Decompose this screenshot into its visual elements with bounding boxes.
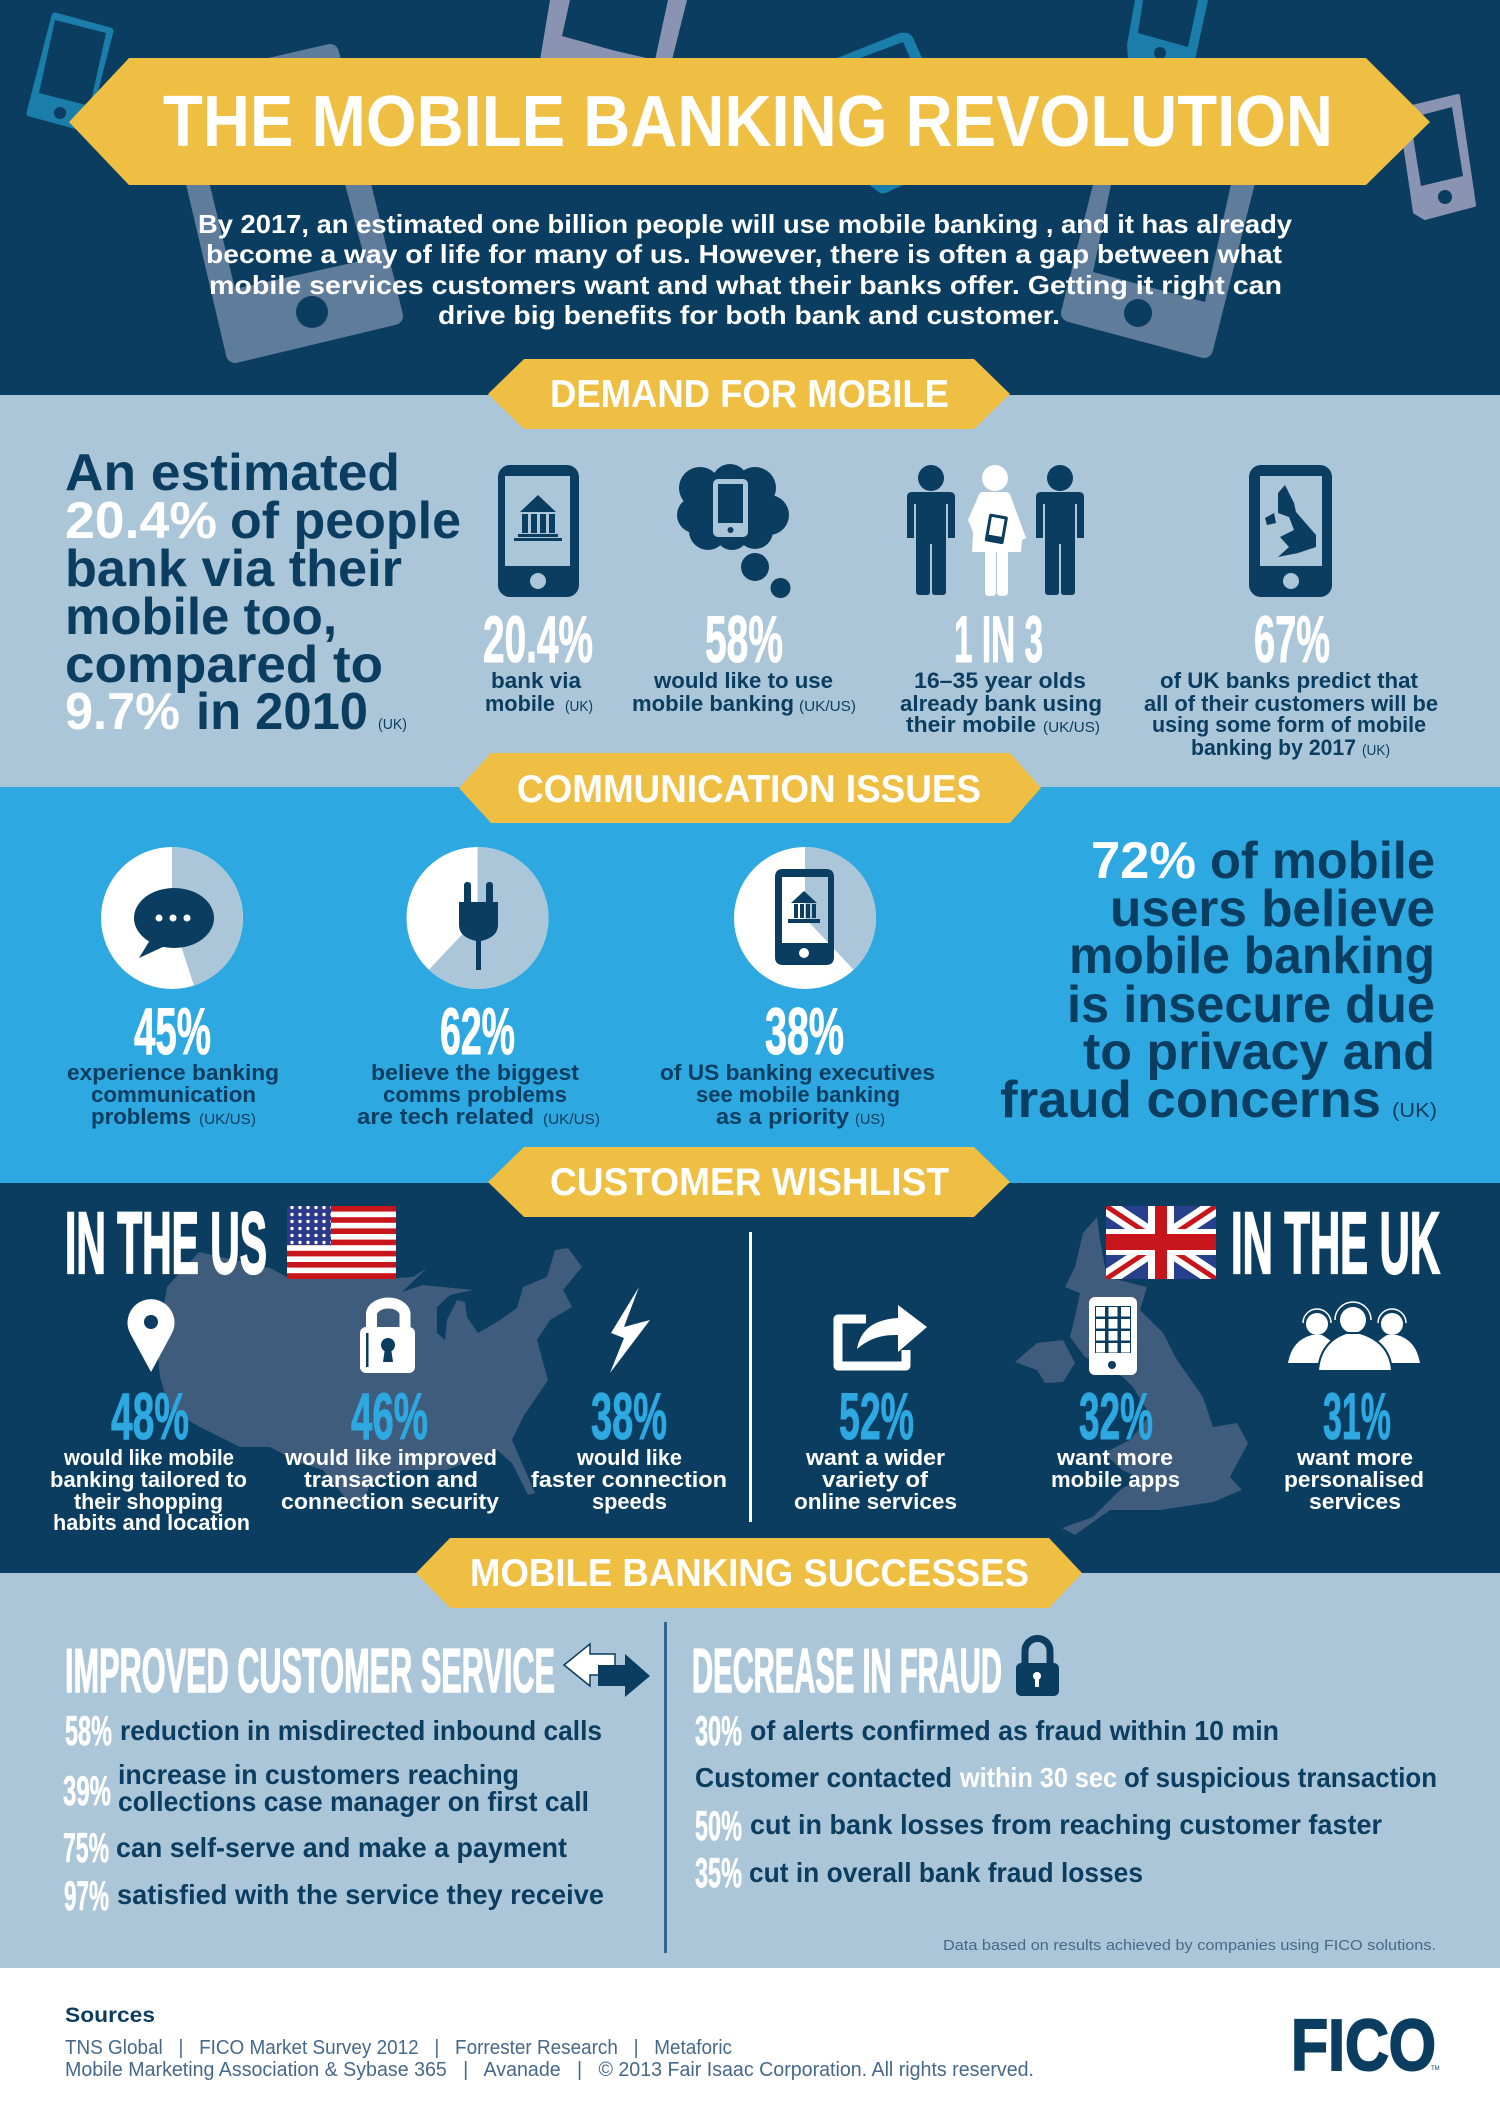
- banner: customer wishlist: CUSTOMER WISHLIST: [550, 1161, 949, 1204]
- stat: 31%: [1284, 1379, 1424, 1514]
- list: improved customer service: can self-serve and make a payment: [116, 1832, 567, 1863]
- stat: 58%: [632, 602, 856, 716]
- list: decrease in fraud: of suspicious transaction: [1124, 1762, 1437, 1793]
- stat: 45%: (UK/US): [199, 1111, 256, 1128]
- big statement: 20.4%: compared to: [65, 636, 383, 694]
- map: UK: [1015, 1217, 1248, 1535]
- list: improved customer service: 97%: [64, 1872, 109, 1919]
- list: improved customer service: 75%: [63, 1824, 109, 1871]
- stat: 46%: [281, 1379, 500, 1514]
- pie: 62% with plug icon: [406, 847, 548, 989]
- stat: 46%: connection security: [281, 1489, 500, 1514]
- stat: 1 in 3: their mobile: [906, 712, 1036, 737]
- stat: 52%: want a wider: [805, 1445, 945, 1470]
- list: decrease in fraud: Customer contacted: [695, 1762, 952, 1793]
- list: decrease in fraud: cut in overall bank fraud losses: [749, 1857, 1143, 1888]
- stat: 32%: mobile apps: [1051, 1467, 1180, 1492]
- list: decrease in fraud: of alerts confirmed as fraud within 10 min: [750, 1715, 1279, 1746]
- stat: 52%: [794, 1379, 957, 1514]
- footer: sources: [65, 2004, 1034, 2081]
- panel: mobile banking successes: DECREASE IN FRAUD: [692, 1637, 1002, 1706]
- stat: 48%: [50, 1379, 250, 1535]
- stat: 1 in 3: 16–35 year olds: [914, 668, 1086, 693]
- stat: 45%: problems: [91, 1104, 191, 1129]
- stat: 1 in 3: (UK/US): [1043, 719, 1100, 736]
- list: decrease in fraud: [695, 1707, 1437, 1896]
- big statement: 20.4%: An estimated: [65, 444, 400, 502]
- stat: 67%: using some form of mobile: [1152, 712, 1426, 737]
- logo: FICO: TM: [1431, 2066, 1440, 2072]
- stat: 62%: [357, 994, 600, 1129]
- big statement: 20.4%: 9.7%: [65, 683, 180, 741]
- stat: 32%: [1051, 1379, 1180, 1492]
- big statement: 72%: 72%: [1091, 832, 1196, 890]
- list: improved customer service: 39%: [63, 1767, 111, 1814]
- stat: 52%: 52%: [839, 1379, 914, 1453]
- stat: 58%: would like to use: [653, 668, 833, 693]
- banner: demand for mobile: DEMAND FOR MOBILE: [550, 373, 949, 416]
- stat: 38%: of US banking executives: [660, 1060, 935, 1085]
- stat: 38%: as a priority: [716, 1104, 850, 1129]
- stat: 48%: would like mobile: [63, 1445, 234, 1470]
- list: decrease in fraud: 30%: [695, 1707, 742, 1754]
- stat: 52%: variety of: [822, 1467, 929, 1492]
- pie: 38% with phone icon: [734, 847, 876, 989]
- icon: phone with UK map: [1249, 465, 1332, 597]
- stat: 62%: are tech related: [357, 1104, 534, 1129]
- stat: 52%: online services: [794, 1489, 957, 1514]
- footer: sources: Mobile Marketing Association & Sybase 365 | Avanade | © 2013 Fair Isaac Corporation. All rights reserved.: [65, 2059, 1034, 2081]
- list: improved customer service: [63, 1707, 604, 1919]
- banner: mobile banking successes: MOBILE BANKING SUCCESSES: [470, 1552, 1029, 1595]
- icon: phone with apps: [1089, 1297, 1137, 1375]
- big statement: 72%: [1000, 832, 1437, 1129]
- stat: 38%: (US): [855, 1111, 885, 1128]
- stat: 58%: mobile banking: [632, 691, 794, 716]
- logo: FICO: FICO: [1291, 2006, 1436, 2086]
- big statement: 72%: to privacy and: [1083, 1023, 1435, 1081]
- stat: 1 in 3: [900, 602, 1102, 737]
- stat: 45%: [67, 994, 279, 1129]
- list: decrease in fraud: 35%: [695, 1849, 742, 1896]
- stat: 67%: of UK banks predict that: [1160, 668, 1419, 693]
- big statement: 20.4%: in 2010: [196, 683, 368, 741]
- list: improved customer service: increase in customers reaching: [118, 1759, 519, 1790]
- decorative background phones: [30, 0, 1474, 354]
- list: decrease in fraud: within 30 sec: [959, 1762, 1117, 1793]
- stat: 48%: their shopping: [74, 1489, 223, 1514]
- big statement: 20.4%: mobile too,: [65, 588, 337, 646]
- big statement: 72%: (UK): [1392, 1100, 1437, 1122]
- stat: 38% speed: speeds: [592, 1489, 667, 1514]
- list: decrease in fraud: 50%: [695, 1802, 742, 1849]
- panel: mobile banking successes: IMPROVED CUSTOMER SERVICE: [65, 1637, 555, 1706]
- stat: 58%: 58%: [705, 602, 783, 676]
- stat: 38% speed: [531, 1379, 727, 1514]
- title banner: [69, 58, 1430, 185]
- icon: location pin: [128, 1299, 174, 1372]
- list: improved customer service: reduction in misdirected inbound calls: [120, 1715, 602, 1746]
- panel: customer wishlist: [0, 1183, 1500, 1573]
- icon: phone with bank: [498, 465, 579, 597]
- stat: 62%: 62%: [440, 994, 515, 1068]
- stat: 45%: 45%: [134, 994, 211, 1068]
- banner: mobile banking successes: [416, 1538, 1082, 1608]
- big statement: 72%: is insecure due: [1067, 976, 1435, 1034]
- banner: communication issues: [459, 753, 1041, 823]
- stat: 62%: believe the biggest: [371, 1060, 580, 1085]
- stat: 48%: 48%: [111, 1379, 189, 1453]
- stat: 67%: 67%: [1254, 602, 1330, 676]
- panel: mobile banking successes: [0, 1573, 1500, 1968]
- big statement: 20.4%: 20.4%: [65, 492, 217, 550]
- panel: demand for mobile: [0, 395, 1500, 787]
- pie: 45% with chat icon: [101, 847, 243, 989]
- stat: 38% speed: would like: [576, 1445, 682, 1470]
- stat: 67%: banking by 2017: [1191, 735, 1356, 760]
- stat: 20.4%: bank via: [491, 668, 582, 693]
- icon: share arrow: [838, 1305, 927, 1366]
- stat: 20.4%: mobile: [485, 691, 555, 716]
- intro paragraph: [198, 209, 1293, 330]
- stat: 67%: (UK): [1362, 742, 1390, 759]
- stat: 45%: communication: [91, 1082, 256, 1107]
- stat: 1 in 3: 1 IN 3: [954, 602, 1043, 676]
- list: improved customer service: collections case manager on first call: [118, 1786, 589, 1817]
- stat: 31%: services: [1309, 1489, 1401, 1514]
- intro paragraph: By 2017, an estimated one billion people will use mobile banking , and it has already: [198, 209, 1293, 239]
- banner: customer wishlist: [488, 1147, 1010, 1217]
- stat: 38% speed: faster connection: [531, 1467, 727, 1492]
- big statement: 20.4%: of people: [230, 492, 461, 550]
- stat: 62%: comms problems: [383, 1082, 567, 1107]
- stat: 32%: want more: [1056, 1445, 1173, 1470]
- list: improved customer service: satisfied with the service they receive: [117, 1879, 604, 1910]
- big statement: 20.4%: [65, 444, 461, 741]
- icon: exchange arrows: [564, 1644, 650, 1697]
- stat: 1 in 3: already bank using: [900, 691, 1102, 716]
- stat: 67%: all of their customers will be: [1144, 691, 1438, 716]
- footer: sources: Sources: [65, 2004, 155, 2027]
- big statement: 20.4%: bank via their: [65, 540, 402, 598]
- stat: 20.4%: 20.4%: [483, 602, 593, 676]
- icon: UK flag: [1106, 1206, 1216, 1279]
- icon: lightning bolt: [610, 1287, 650, 1373]
- stat: 46%: 46%: [351, 1379, 428, 1453]
- footer: sources: TNS Global | FICO Market Survey 2012 | Forrester Research | Metaforic: [65, 2037, 732, 2059]
- banner: demand for mobile: [488, 359, 1010, 429]
- stat: 48%: banking tailored to: [50, 1467, 247, 1492]
- stat: 20.4%: [483, 602, 593, 716]
- intro paragraph: drive big benefits for both bank and customer.: [438, 300, 1060, 330]
- panel: customer wishlist: IN THE US: [65, 1195, 267, 1292]
- stat: 46%: would like improved: [284, 1445, 497, 1470]
- list: decrease in fraud: cut in bank losses from reaching customer faster: [750, 1809, 1382, 1840]
- icon: small padlock: [1016, 1638, 1059, 1696]
- stat: 32%: 32%: [1079, 1379, 1153, 1453]
- big statement: 72%: users believe: [1110, 880, 1435, 938]
- stat: 62%: (UK/US): [543, 1111, 600, 1128]
- intro paragraph: become a way of life for many of us. However, there is often a gap between what: [206, 239, 1282, 269]
- banner: communication issues: COMMUNICATION ISSUES: [517, 768, 981, 811]
- stat: 31%: 31%: [1323, 1379, 1391, 1453]
- icon: three people with phone: [907, 465, 1084, 596]
- stat: 38% speed: 38%: [591, 1379, 667, 1453]
- icon: US flag: [287, 1206, 396, 1279]
- panel: communication issues: [0, 787, 1500, 1183]
- big statement: 72%: mobile banking: [1069, 927, 1435, 985]
- intro paragraph: mobile services customers want and what their banks offer. Getting it right can: [209, 270, 1282, 300]
- title banner: THE MOBILE BANKING REVOLUTION: [163, 82, 1333, 162]
- stat: 20.4%: (UK): [565, 698, 593, 715]
- stat: 31%: personalised: [1284, 1467, 1424, 1492]
- list: improved customer service: 58%: [65, 1707, 112, 1754]
- map: USA: [157, 1248, 582, 1507]
- note: data source: Data based on results achieved by companies using FICO solutions.: [943, 1937, 1436, 1954]
- stat: 31%: want more: [1296, 1445, 1413, 1470]
- big statement: 72%: fraud concerns: [1000, 1071, 1381, 1129]
- stat: 46%: transaction and: [304, 1467, 478, 1492]
- stat: 48%: habits and location: [53, 1510, 250, 1535]
- stat: 38%: see mobile banking: [696, 1082, 900, 1107]
- stat: 58%: (UK/US): [799, 698, 856, 715]
- stat: 45%: experience banking: [67, 1060, 279, 1085]
- big statement: 72%: of mobile: [1210, 832, 1435, 890]
- big statement: 20.4%: (UK): [378, 716, 407, 733]
- panel: header background: [0, 0, 1500, 396]
- stat: 38%: 38%: [765, 994, 844, 1068]
- icon: padlock: [360, 1303, 415, 1373]
- stat: 67%: [1144, 602, 1438, 760]
- icon: group of people: [1288, 1302, 1420, 1371]
- icon: thought cloud with phone: [677, 464, 790, 598]
- stat: 38%: [660, 994, 935, 1129]
